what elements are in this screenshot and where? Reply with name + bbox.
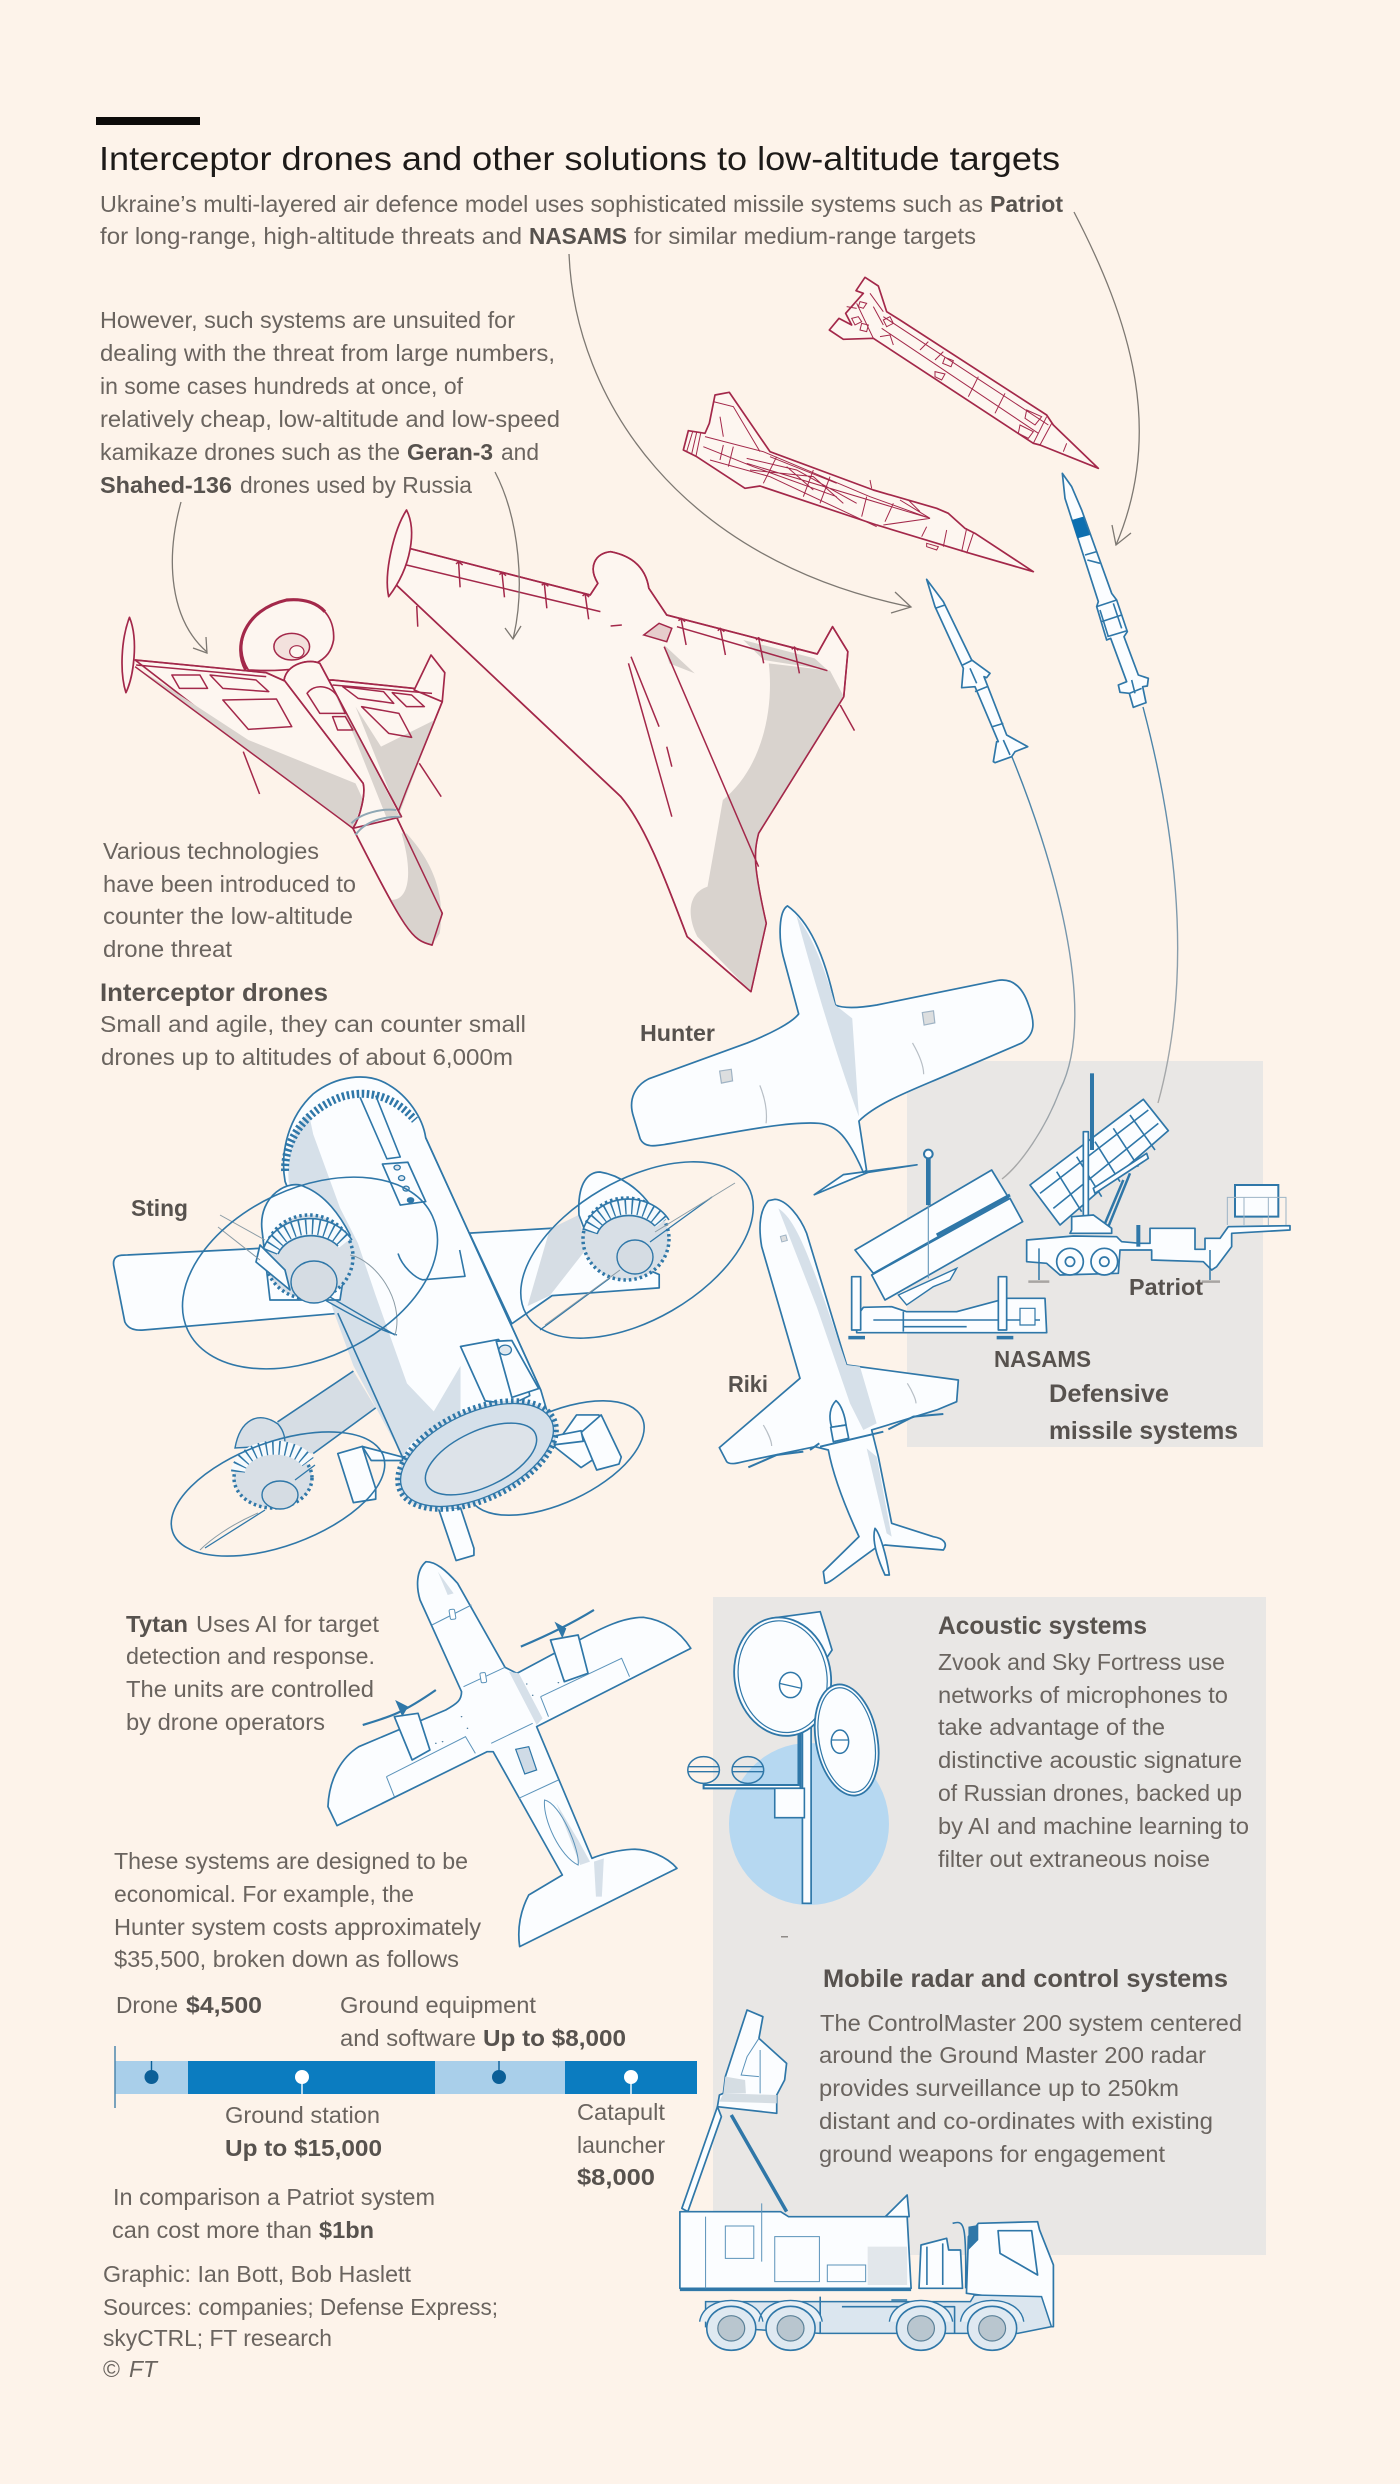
acoustic small sensors xyxy=(688,1757,764,1783)
comparison text block: In comparison a Patriot system xyxy=(113,2184,435,2210)
Tytan text block: The units are controlled xyxy=(126,1676,374,1702)
cost label: drone: $4,500 xyxy=(186,1992,262,2018)
comparison text block xyxy=(112,2184,435,2243)
radar text block: distant and co-ordinates with existing xyxy=(819,2108,1213,2134)
intro text block: for long-range, high-altitude threats and xyxy=(100,223,522,249)
radar text block: provides surveillance up to 250km xyxy=(819,2075,1179,2101)
sting rear ring xyxy=(381,1378,573,1532)
cost label: catapult launcher xyxy=(577,2099,666,2190)
acoustic blue circle xyxy=(729,1743,889,1905)
cost label: ground station xyxy=(225,2102,382,2161)
illustration: Hunter drone xyxy=(632,906,1033,1195)
acoustic pole xyxy=(802,1723,811,1903)
label: NASAMS: NASAMS xyxy=(994,1346,1091,1372)
sting wings and fuselage xyxy=(114,1077,659,1561)
acoustic systems text block xyxy=(938,1612,1249,1872)
illustration: Sting drone xyxy=(114,1077,783,1581)
acoustic systems text block: take advantage of the xyxy=(938,1714,1165,1740)
sting lower left engine xyxy=(200,1418,315,1550)
bar segment: ground equipment xyxy=(435,2061,565,2094)
threat text block: in some cases hundreds at once, of xyxy=(100,373,464,399)
arrow: Shahed-136 label to drone xyxy=(172,502,207,653)
interceptor drones description: drones up to altitudes of about 6,000m xyxy=(101,1044,513,1070)
sting right engine xyxy=(540,1172,735,1330)
panel: acoustic and radar systems background xyxy=(713,1597,1266,2255)
arrow: NASAMS label to missile xyxy=(569,254,911,613)
trail: Patriot interceptor flight path xyxy=(1143,707,1178,1103)
acoustic systems text block: networks of microphones to xyxy=(938,1682,1228,1708)
title: Interceptor drones and other solutions to low-altitude targets xyxy=(99,140,1060,177)
acoustic disc small xyxy=(807,1681,886,1799)
threat text block: drones used by Russia xyxy=(240,472,472,498)
illustration: Riki drone xyxy=(719,1199,958,1583)
acoustic systems text block: Zvook and Sky Fortress use xyxy=(938,1649,1225,1675)
intro text block: NASAMS xyxy=(529,223,627,249)
cost intro text block: economical. For example, the xyxy=(114,1881,414,1907)
threat text block: Shahed-136 xyxy=(100,472,232,498)
label: Sting: Sting xyxy=(131,1195,188,1221)
cost label: ground station: Ground station xyxy=(225,2102,380,2128)
radar text block: The ControlMaster 200 system centered xyxy=(820,2010,1242,2036)
intro text block: for similar medium-range targets xyxy=(634,223,976,249)
heading: defensive missile systems: missile systems xyxy=(1049,1417,1238,1445)
credits and sources: FT xyxy=(129,2356,159,2382)
trail: NASAMS interceptor flight path xyxy=(1002,757,1075,1179)
bar axis xyxy=(114,2046,116,2108)
acoustic disc large xyxy=(727,1613,838,1740)
illustration: lower cruise missile xyxy=(683,392,1033,572)
acoustic arm shelf xyxy=(704,1733,800,1788)
illustration: Patriot interceptor missile xyxy=(1062,473,1148,707)
sting rear right propeller disc xyxy=(451,1377,661,1539)
threat text block: dealing with the threat from large numbers, xyxy=(100,340,555,366)
intro text block: Ukraine’s multi-layered air defence model uses sophisticated missile systems such as xyxy=(100,191,983,217)
bar markers xyxy=(144,2061,638,2094)
bar segment: catapult xyxy=(565,2061,697,2094)
radar text block: ground weapons for engagement xyxy=(819,2141,1166,2167)
acoustic systems text block: of Russian drones, backed up xyxy=(938,1780,1242,1806)
cost label: drone: Drone xyxy=(116,1992,178,2018)
comparison text block: $1bn xyxy=(319,2217,374,2243)
threat text block: and xyxy=(501,439,539,465)
interceptor drones description xyxy=(100,1011,526,1070)
heading: defensive missile systems xyxy=(1049,1380,1238,1445)
credits and sources xyxy=(103,2261,498,2382)
label: Hunter: Hunter xyxy=(640,1020,715,1046)
various technologies text block xyxy=(103,838,356,962)
illustration: upper cruise missile xyxy=(829,277,1098,468)
label: Riki: Riki xyxy=(728,1371,768,1397)
various technologies text block: drone threat xyxy=(103,936,233,962)
heading: interceptor drones: Interceptor drones xyxy=(100,979,328,1007)
panel: defensive missile systems background xyxy=(907,1061,1263,1447)
credits and sources: Graphic: Ian Bott, Bob Haslett xyxy=(103,2261,412,2287)
credits and sources: Sources: companies; Defense Express; xyxy=(103,2294,498,2320)
bar segment: drone xyxy=(115,2061,188,2094)
intro text block xyxy=(100,191,1063,249)
acoustic box xyxy=(775,1788,804,1818)
threat text block xyxy=(100,307,560,498)
threat text block: However, such systems are unsuited for xyxy=(100,307,515,333)
title accent bar xyxy=(96,117,200,125)
credits and sources: skyCTRL; FT research xyxy=(103,2325,332,2351)
Tytan text block: by drone operators xyxy=(126,1709,325,1735)
cost intro text block: $35,500, broken down as follows xyxy=(114,1946,459,1972)
comparison text block: can cost more than xyxy=(112,2217,312,2243)
acoustic top housing xyxy=(763,1612,832,1662)
illustration: NASAMS interceptor missile xyxy=(927,579,1028,763)
cost label: ground equipment: Up to $8,000 xyxy=(483,2025,626,2051)
cost label: catapult launcher: $8,000 xyxy=(577,2164,655,2190)
cost breakdown bar chart xyxy=(115,2046,697,2108)
bar segment: ground station xyxy=(188,2061,435,2094)
threat text block: Geran-3 xyxy=(407,439,493,465)
sting left engine xyxy=(218,1185,397,1335)
illustration: radar truck xyxy=(680,2010,1053,2350)
illustration: Geran-3 drone xyxy=(387,510,854,992)
acoustic systems text block: filter out extraneous noise xyxy=(938,1846,1210,1872)
acoustic systems text block: distinctive acoustic signature xyxy=(938,1747,1242,1773)
small dash mark xyxy=(781,1936,788,1938)
radar text block xyxy=(819,1965,1242,2167)
cost intro text block: Hunter system costs approximately xyxy=(114,1914,482,1940)
sting propeller discs xyxy=(152,1125,783,1581)
cost label: ground equipment: and software xyxy=(340,2025,476,2051)
cost label: catapult launcher: launcher xyxy=(577,2132,665,2158)
illustration: Shahed-136 drone xyxy=(122,600,445,945)
various technologies text block: Various technologies xyxy=(103,838,319,864)
radar text block: Mobile radar and control systems xyxy=(823,1965,1228,1993)
illustration: Tytan drone xyxy=(328,1562,691,1947)
acoustic systems text block: Acoustic systems xyxy=(938,1612,1147,1640)
various technologies text block: counter the low-altitude xyxy=(103,903,353,929)
Tytan text block: detection and response. xyxy=(126,1643,375,1669)
threat text block: relatively cheap, low-altitude and low-speed xyxy=(100,406,560,432)
Tytan text block: Uses AI for target xyxy=(196,1611,380,1637)
radar text block: around the Ground Master 200 radar xyxy=(819,2042,1206,2068)
acoustic systems text block: by AI and machine learning to xyxy=(938,1813,1249,1839)
threat text block: kamikaze drones such as the xyxy=(100,439,400,465)
intro text block: Patriot xyxy=(990,191,1063,217)
Tytan text block xyxy=(126,1611,380,1735)
arrow: Geran-3 label to drone xyxy=(495,472,521,639)
cost label: catapult launcher: Catapult xyxy=(577,2099,666,2125)
cost label: ground station: Up to $15,000 xyxy=(225,2135,382,2161)
cost intro text block xyxy=(114,1848,482,1972)
label: Patriot: Patriot xyxy=(1129,1274,1203,1300)
cost label: drone xyxy=(116,1992,262,2018)
cost intro text block: These systems are designed to be xyxy=(114,1848,468,1874)
cost label: ground equipment: Ground equipment xyxy=(340,1992,537,2018)
Tytan text block: Tytan xyxy=(126,1611,188,1637)
arrow: Patriot label to missile xyxy=(1074,212,1139,545)
interceptor drones description: Small and agile, they can counter small xyxy=(100,1011,526,1037)
illustration: acoustic sensor xyxy=(688,1612,889,1905)
various technologies text block: have been introduced to xyxy=(103,871,356,897)
credits and sources: © xyxy=(103,2356,120,2382)
illustration: NASAMS launcher xyxy=(848,1150,1047,1338)
illustration: Patriot launcher xyxy=(1027,1073,1290,1282)
heading: defensive missile systems: Defensive xyxy=(1049,1380,1169,1408)
cost label: ground equipment xyxy=(340,1992,626,2051)
